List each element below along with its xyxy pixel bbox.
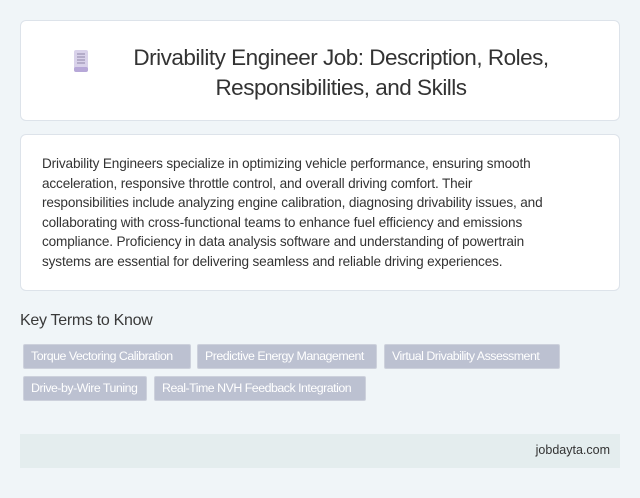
footer [20,434,620,468]
tag: Torque Vectoring Calibration [31,349,173,363]
tag: Drive-by-Wire Tuning [31,381,137,395]
description text: responsibilities include analyzing engine calibration, diagnosing drivability issues, and [42,195,542,210]
tag [154,376,366,401]
header card [20,20,620,121]
tag [197,344,377,369]
title: Drivability Engineer Job: Description, Roles, Responsibilities, and Skills [133,45,549,100]
tag: Virtual Drivability Assessment [392,349,539,363]
tag [23,376,147,401]
description text: Drivability Engineers specialize in optimizing vehicle performance, ensuring smooth [42,156,530,171]
description text [42,156,542,269]
description text: collaborating with cross-functional teams to enhance fuel efficiency and emissions [42,214,522,230]
footer text: jobdayta.com [536,443,610,457]
tag [23,344,191,369]
description text: compliance. Proficiency in data analysis software and understanding of powertrain [42,234,524,249]
description text: acceleration, responsive throttle control, and overall driving comfort. Their [42,176,472,190]
icon: document [74,50,88,72]
heading: key terms: Key Terms to Know [20,312,152,329]
description text: systems are essential for delivering seamless and reliable driving experiences. [42,254,502,268]
tag [384,344,560,369]
description card [20,134,620,291]
tag: Predictive Energy Management [205,349,364,363]
tag: Real-Time NVH Feedback Integration [162,381,351,395]
